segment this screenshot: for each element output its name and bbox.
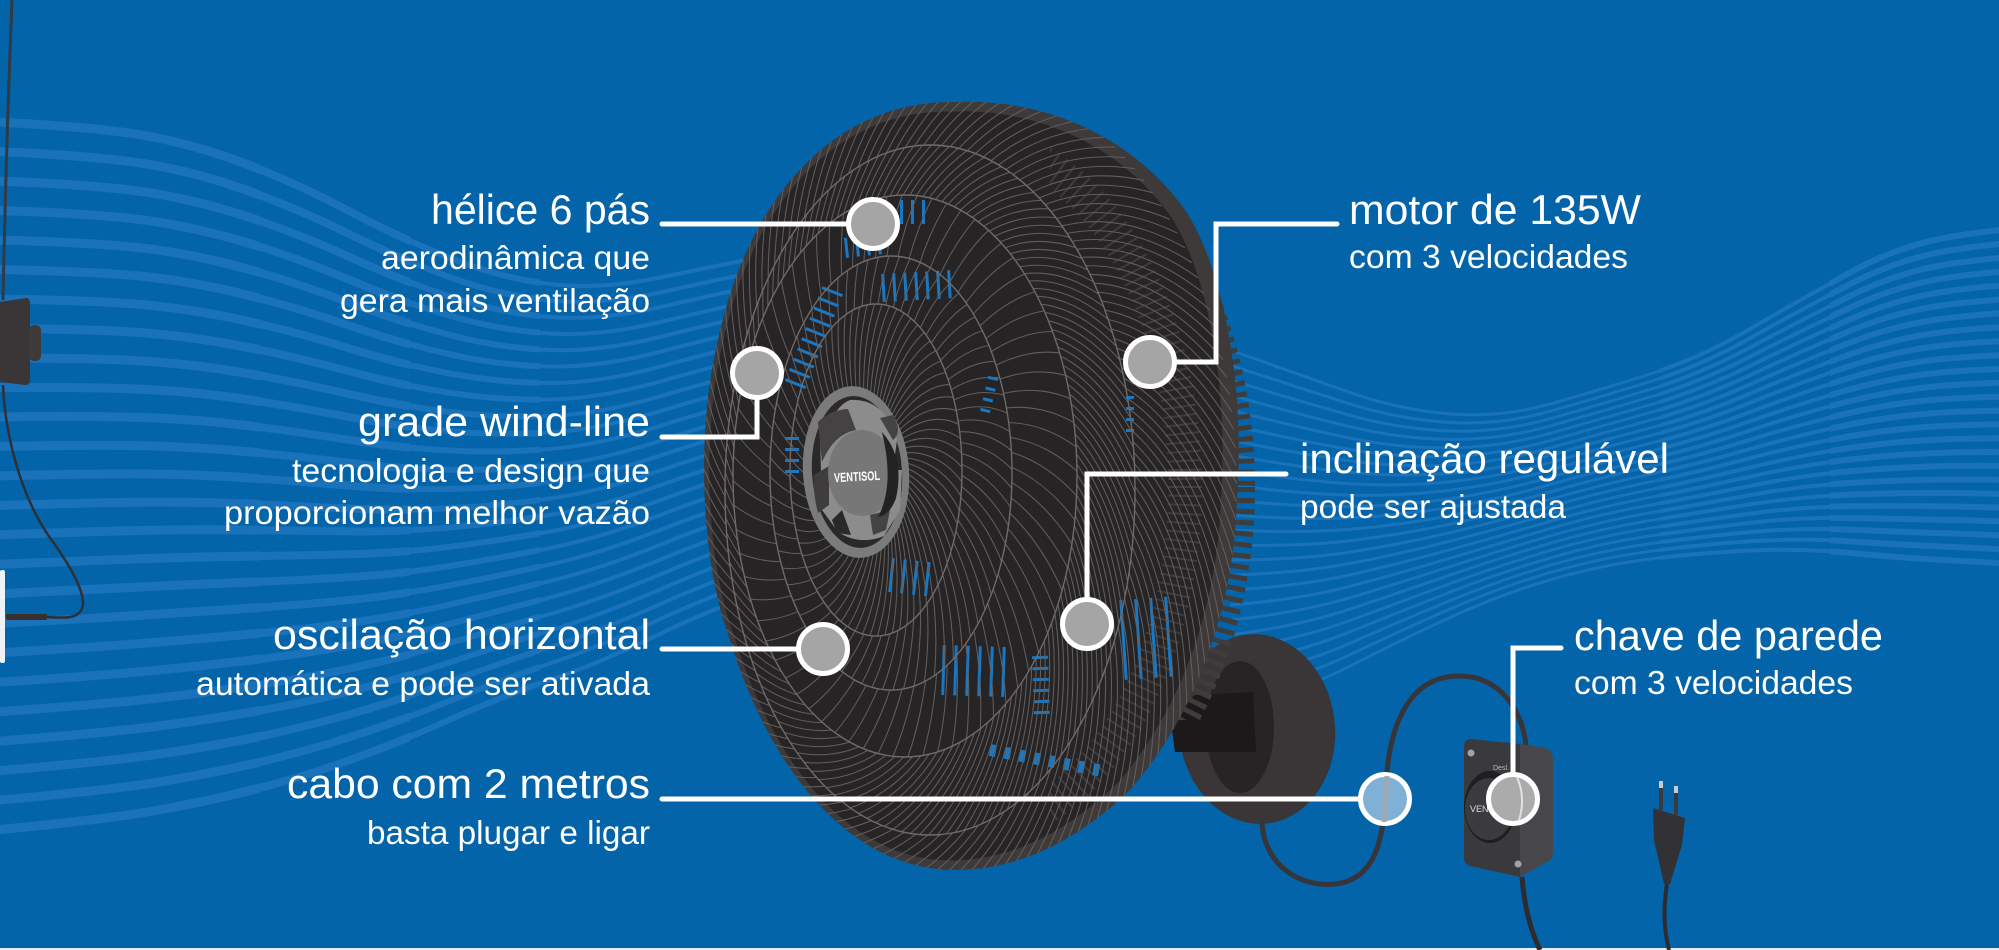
heading: cabo com 2 metros	[287, 760, 650, 807]
leader line	[662, 222, 850, 226]
wall switch: VENTISOL	[1470, 804, 1515, 814]
heading: oscilação horizontal	[273, 611, 650, 658]
description: com 3 velocidades	[1574, 664, 1853, 701]
leader line	[1513, 648, 1561, 775]
bottom edge strip	[0, 948, 1999, 950]
marker	[1126, 338, 1174, 386]
fan hub with logo	[797, 383, 915, 561]
fan grille	[704, 102, 1237, 870]
fan hub with logo: VENTISOL	[834, 468, 880, 485]
description: automática e pode ser ativada	[196, 665, 651, 702]
partial product at left edge: cable and switch	[0, 0, 83, 663]
heading: grade wind-line	[358, 398, 650, 445]
heading: hélice 6 pás	[431, 186, 650, 233]
background wind waves: left	[0, 122, 770, 830]
cable from mount to switch	[1262, 676, 1526, 884]
marker	[1488, 774, 1538, 824]
callout: hélice 6 pás	[340, 186, 898, 319]
fan rim	[704, 102, 1239, 870]
marker	[1360, 774, 1410, 824]
leader line	[1087, 474, 1286, 600]
marker	[1062, 600, 1112, 648]
description: com 3 velocidades	[1349, 238, 1628, 275]
description: aerodinâmica que	[381, 239, 650, 276]
callout: hélice 6 pás: gera mais ventilação	[340, 282, 650, 319]
callout: cabo com 2 metros	[287, 760, 1410, 851]
callout: oscilação horizontal	[196, 611, 848, 702]
wall switch: Desl.	[1493, 765, 1509, 772]
marker	[848, 200, 898, 248]
heading: inclinação regulável	[1300, 435, 1669, 482]
description: basta plugar e ligar	[367, 814, 650, 851]
description: pode ser ajustada	[1300, 488, 1567, 525]
knob line seen through marker	[1517, 777, 1522, 820]
callout: grade wind-line	[224, 348, 782, 531]
marker	[732, 348, 782, 398]
power plug	[1653, 781, 1685, 950]
callout: motor de 135W	[1126, 186, 1641, 386]
callout: grade wind-line: proporcionam melhor vazão	[224, 494, 650, 531]
callout: chave de parede	[1488, 612, 1883, 824]
cable seen through marker	[1384, 776, 1387, 822]
heading: motor de 135W	[1349, 186, 1641, 233]
heading: chave de parede	[1574, 612, 1883, 659]
callout: inclinação regulável	[1062, 435, 1669, 648]
fan rear teeth	[1178, 304, 1255, 720]
wall mount disc and arm	[1169, 626, 1345, 832]
wall switch	[1464, 739, 1553, 950]
leader line	[662, 398, 757, 437]
leader line	[1175, 224, 1337, 362]
leader line	[662, 646, 800, 652]
description: tecnologia e design que	[292, 452, 650, 489]
background wind waves: right	[1230, 228, 1999, 710]
leader line	[662, 796, 1360, 802]
fan	[704, 102, 1255, 870]
marker	[798, 624, 848, 674]
